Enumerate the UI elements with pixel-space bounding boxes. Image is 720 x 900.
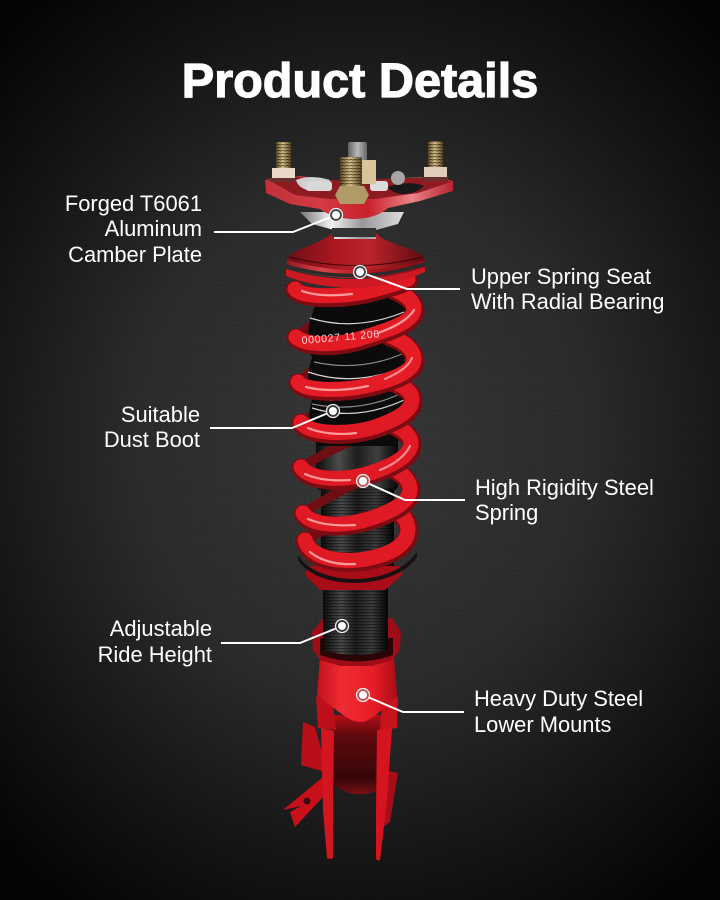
lower seat lip <box>286 267 425 288</box>
label: Forged T6061 <box>65 191 202 216</box>
leader line <box>214 215 336 232</box>
stud rear <box>348 142 376 184</box>
lower spring perch <box>298 552 417 590</box>
marker <box>330 208 342 222</box>
marker <box>356 688 370 702</box>
callout: Suitable Dust Boot <box>104 402 340 452</box>
plate cut-outs <box>296 177 330 191</box>
inner tube <box>334 715 386 794</box>
stud right <box>422 141 448 181</box>
title: Product Details <box>182 54 538 108</box>
marker <box>336 620 348 632</box>
camber plate assembly <box>265 141 453 239</box>
label: Camber Plate <box>68 242 202 267</box>
coil 2 <box>296 290 415 346</box>
rear bracket <box>383 770 398 827</box>
coil 1 <box>295 279 408 298</box>
label: Dust Boot <box>104 427 200 452</box>
coil spring front turns <box>295 279 415 564</box>
slotted arm <box>283 777 323 827</box>
marker <box>356 474 370 488</box>
shock body <box>316 440 398 573</box>
left bracket <box>301 722 325 772</box>
label: Aluminum <box>105 216 202 241</box>
label: Adjustable <box>110 616 212 641</box>
coil stamped marking: 000027 11 206 <box>301 328 380 347</box>
collar <box>312 618 401 666</box>
coil 4 <box>301 382 413 434</box>
label: High Rigidity Steel <box>475 475 654 500</box>
label: Suitable <box>121 402 200 427</box>
coil spring back parts <box>296 290 396 540</box>
stud front <box>335 157 369 204</box>
leader line <box>210 411 333 428</box>
stud left <box>270 142 296 182</box>
spring seat ring and camber dome <box>286 233 425 288</box>
plate hardware <box>306 181 332 191</box>
callout: Forged T6061 Aluminum Camber Plate <box>65 191 342 267</box>
callout: Heavy Duty Steel Lower Mounts <box>356 686 643 737</box>
coilover illustration <box>265 141 453 860</box>
callout: High Rigidity Steel Spring <box>356 474 654 525</box>
marker <box>354 266 366 278</box>
shoulder left <box>316 696 336 730</box>
coil 7 <box>305 510 409 564</box>
label: Heavy Duty Steel <box>474 686 643 711</box>
black rubber ring <box>286 264 425 276</box>
leader line <box>363 695 464 712</box>
callout: Adjustable Ride Height <box>98 616 348 667</box>
left fork <box>321 728 334 859</box>
right fork <box>376 728 392 860</box>
red top plate <box>265 176 453 219</box>
dust boot bellows <box>308 295 409 446</box>
leader line <box>363 481 465 500</box>
arm bolt <box>304 798 310 804</box>
coil 6 <box>303 470 411 526</box>
label: Spring <box>475 500 538 525</box>
shoulder right <box>380 696 398 730</box>
label: Lower Mounts <box>474 712 612 737</box>
coil 5 <box>301 426 412 480</box>
bearing hardware <box>300 212 404 239</box>
leader line <box>360 272 460 289</box>
leader line <box>221 626 342 643</box>
main red body <box>317 657 397 722</box>
lower fork and mount <box>283 618 401 860</box>
label: Ride Height <box>98 642 212 667</box>
label: With Radial Bearing <box>471 289 664 314</box>
lower threaded body <box>323 575 388 655</box>
coil 3 <box>298 336 415 391</box>
callout: Upper Spring Seat <box>354 264 664 314</box>
seat band <box>287 260 425 278</box>
dome <box>288 233 424 275</box>
marker <box>326 404 340 418</box>
label: Upper Spring Seat <box>471 264 651 289</box>
